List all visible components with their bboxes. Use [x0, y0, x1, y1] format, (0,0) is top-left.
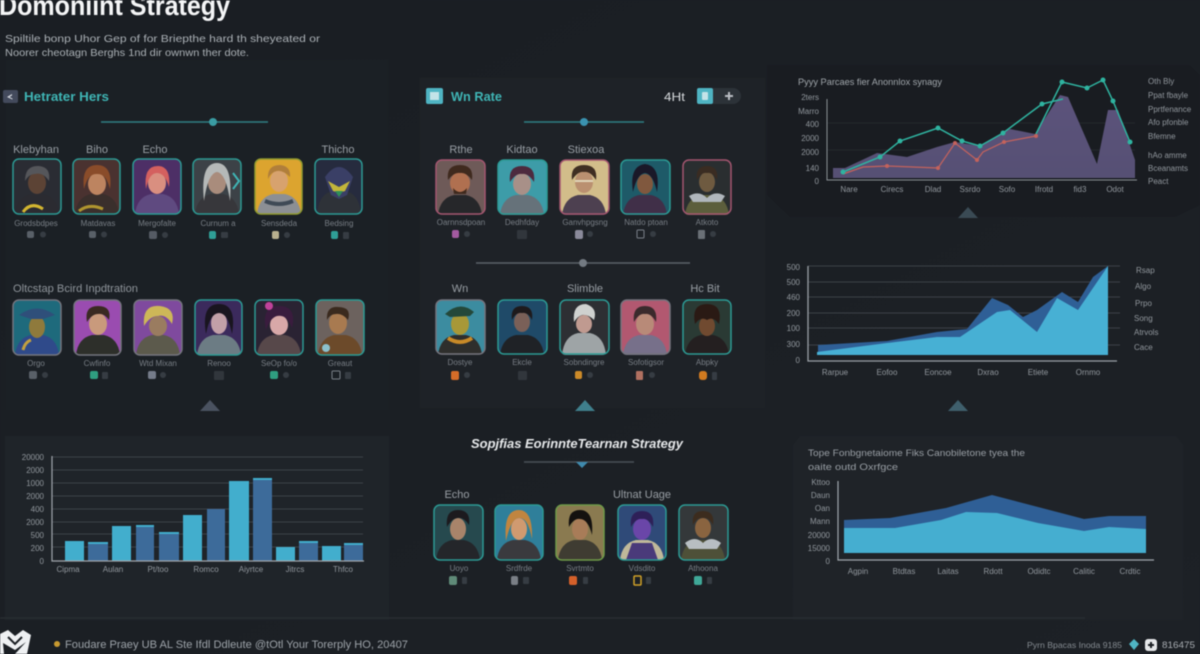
- hero card 23: Uoyo: [450, 564, 469, 573]
- hero card 10: Renoo: [207, 359, 231, 368]
- hero card 21: Sofotigsor: [628, 358, 664, 367]
- red line series: [843, 136, 1036, 174]
- x labels: Crdtic: [1120, 567, 1140, 576]
- x labels: fid3: [1074, 185, 1087, 194]
- triangle marker left: [200, 400, 220, 411]
- footer divider: [0, 617, 1085, 619]
- hero card 6: [315, 159, 362, 239]
- panel: chart 2: [787, 263, 1158, 377]
- heading: hot heroes: Hetrater Hers: [24, 90, 109, 104]
- y labels: 400: [31, 505, 45, 514]
- x labels: Rdott: [983, 567, 1003, 576]
- panel: chart 3: [793, 436, 1183, 620]
- hero card 17: Atkoto: [696, 218, 719, 227]
- hero card 15: Ganvhpgsng: [562, 218, 608, 227]
- x labels: Eofoo: [877, 368, 898, 377]
- x labels: Agpin: [848, 567, 868, 576]
- triangle marker chart 2: [948, 400, 968, 411]
- heading: win rate: Wn Rate: [451, 90, 502, 104]
- x labels: [840, 185, 1124, 194]
- x labels: Ornmo: [1076, 368, 1101, 377]
- x labels: Btdtas: [893, 567, 915, 576]
- legend: Rsap: [1136, 266, 1155, 275]
- hero card 1: Grodsbdpes: [14, 219, 58, 228]
- x labels: [56, 565, 354, 574]
- y axis labels: 2000: [801, 134, 820, 143]
- footer right: 816475: [1162, 640, 1195, 651]
- hero card 17: [683, 160, 731, 239]
- hero card 5: Sensdeda: [261, 219, 298, 228]
- hero card 7: Orgo: [27, 359, 45, 368]
- slider: hot heroes: [101, 118, 268, 126]
- triangle marker chart 1: [958, 207, 978, 218]
- chart title: Pyyy Parcaes fier Anonnlox synagy: [798, 77, 943, 87]
- footer right: [1027, 639, 1195, 651]
- dark blue area: [844, 495, 1146, 553]
- hero card 6: Bedsing: [325, 219, 353, 228]
- panel: chart 1: [767, 65, 1200, 217]
- legend: Ppat fbayle: [1148, 91, 1189, 100]
- x labels: Nare: [840, 185, 858, 194]
- toggle: 4Ht: 4Ht: [664, 90, 686, 104]
- legend: Oth Bly: [1148, 77, 1174, 86]
- hero card 8: Cwfinfo: [84, 359, 111, 368]
- hero labels row 1: Klebyhan: [13, 144, 59, 156]
- y labels: 100: [787, 324, 801, 333]
- legend: Afo pfonble: [1148, 118, 1189, 127]
- bars: [65, 478, 363, 561]
- data points: [840, 78, 1132, 174]
- hero labels row 2 middle: Slimble: [567, 283, 603, 295]
- y labels: 20000: [808, 531, 831, 540]
- light blue area: [817, 266, 1108, 355]
- hero card 5: [255, 159, 302, 239]
- hero labels row 2 middle: Wn: [452, 283, 468, 295]
- y axis labels: 0: [815, 177, 820, 186]
- teal line series: [843, 80, 1130, 172]
- hero card 4: [193, 159, 241, 239]
- x labels: Pt/too: [148, 565, 169, 574]
- toggle: 4Ht: [664, 88, 741, 104]
- footer text left: Foudare Praey UB AL Ste Ifdl Ddleute @tOtl Your Torerply HO, 20407: [65, 639, 408, 651]
- y labels: 2000: [26, 466, 45, 475]
- y labels: 0: [40, 557, 45, 566]
- hero card 14: [498, 160, 547, 239]
- y labels: Daun: [811, 491, 830, 500]
- hero card 27: Athoona: [688, 564, 718, 573]
- legend: [1148, 77, 1192, 186]
- y labels: 15000: [808, 544, 831, 553]
- y labels: 500: [787, 263, 801, 272]
- x labels: Rarpue: [822, 368, 849, 377]
- x labels: Eoncoe: [924, 368, 952, 377]
- hero card 14: Dedhfday: [505, 218, 539, 227]
- hero card 22: Abpky: [696, 358, 718, 367]
- hero card 16: [621, 160, 670, 238]
- chart title: oaite outd Oxrfgce: [808, 462, 898, 473]
- hero card 12: [316, 300, 364, 379]
- y axis labels: Marro: [798, 107, 820, 116]
- light blue area: [844, 512, 1146, 553]
- hero card 25: [556, 505, 604, 585]
- x labels: Odot: [1106, 185, 1124, 194]
- x labels: Ifrotd: [1035, 185, 1053, 194]
- hero labels bottom: [444, 489, 671, 501]
- y labels: 500: [787, 278, 801, 287]
- hero card 25: Svrtmto: [566, 564, 594, 573]
- hero card 9: [134, 300, 182, 379]
- y axis labels: 2ters: [801, 93, 819, 102]
- hero card 26: Vdsdito: [629, 564, 656, 573]
- legend: Pprtfenance: [1148, 105, 1192, 114]
- hero card 13: Oarnnsdpoan: [437, 218, 485, 227]
- hero card 24: [495, 505, 543, 585]
- panel: background hero areas: [6, 60, 765, 410]
- axes: [52, 456, 364, 561]
- y labels: 2000: [26, 492, 45, 501]
- hero card 11: [255, 300, 303, 379]
- hero labels row 1 middle: [449, 144, 605, 156]
- slider: win rate: [524, 118, 644, 126]
- legend: Algo: [1135, 282, 1152, 291]
- y axis labels: [798, 93, 820, 186]
- dark blue area: [818, 266, 1108, 355]
- axes: [808, 266, 1117, 361]
- hero card 23: [434, 505, 483, 585]
- y labels: [787, 263, 801, 365]
- chart title: Tope Fonbgnetaiome Fiks Canobiletone tyea the: [808, 448, 1025, 459]
- hero labels row 2 middle: Hc Bit: [690, 283, 720, 295]
- y labels: 2000: [26, 518, 45, 527]
- y labels: [808, 478, 831, 566]
- y labels: Mann: [810, 517, 830, 526]
- hero card 9: Wtd Mixan: [139, 359, 177, 368]
- y labels: 460: [787, 293, 801, 302]
- x labels: [822, 368, 1101, 377]
- gridlines and axes: [827, 123, 1135, 150]
- legend: Bceanamts: [1148, 164, 1188, 173]
- hero card 3: [133, 159, 181, 239]
- x labels: Jitrcs: [286, 565, 304, 574]
- hero card 19: Ekcle: [512, 358, 532, 367]
- legend: Bfemne: [1148, 132, 1176, 141]
- legend: Peact: [1148, 177, 1169, 186]
- hero labels bottom: Echo: [444, 489, 470, 501]
- hero card 13: [436, 160, 485, 238]
- hero labels row 1 middle: Kidtao: [506, 144, 538, 156]
- hero card 16: Natdo ptoan: [624, 218, 668, 227]
- legend: Song: [1134, 314, 1153, 323]
- y labels: Oan: [815, 504, 830, 513]
- x labels: Romco: [193, 565, 219, 574]
- hero card 22: [683, 300, 731, 380]
- purple area: [833, 95, 1135, 178]
- divider with marker: [524, 462, 634, 468]
- hero labels bottom: Ultnat Uage: [613, 489, 671, 501]
- slider: grey: [476, 259, 690, 267]
- subtitle text: [5, 33, 321, 59]
- legend: [1134, 266, 1158, 352]
- x labels: Aulan: [103, 565, 123, 574]
- x labels: Odidtc: [1027, 567, 1051, 576]
- x labels: Dlad: [925, 185, 941, 194]
- hero card 1: [13, 159, 61, 238]
- x labels: Thfco: [333, 565, 354, 574]
- hero card 21: [621, 300, 670, 380]
- hero labels row 1: [13, 144, 355, 156]
- hero card 20: Sobndingre: [564, 358, 605, 367]
- hero labels row 1: Thicho: [321, 144, 355, 156]
- y labels: [22, 453, 45, 566]
- hero card 15: [560, 160, 609, 239]
- y labels: 0: [796, 356, 801, 365]
- y labels: 200: [787, 309, 801, 318]
- y axis labels: 400: [806, 120, 820, 129]
- y labels: 300: [787, 340, 801, 349]
- hero labels row 1 middle: Rthe: [449, 144, 473, 156]
- hero card 12: Greaut: [328, 359, 353, 368]
- x labels: Laitas: [937, 567, 959, 576]
- hero card 18: [436, 300, 485, 380]
- hero card 20: [560, 300, 609, 379]
- y labels: 1000: [26, 479, 45, 488]
- y axis labels: 2000: [801, 148, 820, 157]
- triangle marker middle: [575, 400, 595, 411]
- y axis labels: 140: [806, 164, 820, 173]
- hero labels row 2 middle: [452, 283, 720, 295]
- heading: team strategy: Sopjfias EorinnteTearnan Strategy: [471, 437, 684, 451]
- x labels: Cipma: [56, 565, 80, 574]
- hero card 10: [195, 300, 242, 380]
- x labels: Aiyrtce: [239, 565, 264, 574]
- icon: shield logo: [0, 630, 31, 654]
- x labels: Cirecs: [881, 185, 903, 194]
- hero card 11: SeOp fo/o: [261, 359, 298, 368]
- hero card 24: Srdfrde: [506, 564, 533, 573]
- hero labels row 1: Biho: [86, 144, 108, 156]
- x labels: Dxrao: [977, 368, 999, 377]
- x labels: Calitic: [1073, 567, 1095, 576]
- panel: bar chart: [5, 436, 389, 620]
- hero card 3: Mergofalte: [138, 219, 176, 228]
- hero card 18: Dostye: [448, 358, 473, 367]
- y labels: Kttoo: [811, 478, 831, 487]
- hero labels row 1: Echo: [142, 144, 168, 156]
- section label: second left row: Oltcstap Bcird Inpdtration: [13, 283, 138, 295]
- legend: Prpo: [1135, 299, 1152, 308]
- hero card 19: [498, 300, 547, 380]
- heading: win rate: [426, 88, 502, 104]
- y labels: 200: [31, 544, 45, 553]
- gridlines: [808, 266, 1120, 345]
- footer right: Pyrn Bpacas Inoda 9185: [1027, 640, 1122, 650]
- legend: Atrvols: [1134, 328, 1158, 337]
- x labels: Sofo: [999, 185, 1016, 194]
- legend: hAo amme: [1148, 151, 1187, 160]
- hero card 2: [73, 159, 120, 238]
- hero card 7: [13, 300, 61, 379]
- hero card 26: [618, 505, 666, 585]
- hero card 27: [679, 505, 728, 585]
- hero card 4: Curnum a: [200, 219, 236, 228]
- x labels: Ssrdo: [960, 185, 981, 194]
- axes: [838, 481, 1154, 560]
- y labels: 20000: [22, 453, 45, 462]
- y labels: 0: [826, 557, 831, 566]
- x labels: Etiete: [1028, 368, 1049, 377]
- hero labels row 1 middle: Stiexoa: [568, 144, 605, 156]
- chart title: [808, 448, 1025, 473]
- subtitle text: Noorer cheotagn Berghs 1nd dir ownwn ther dote.: [5, 47, 249, 59]
- legend: Cace: [1134, 343, 1153, 352]
- x labels: [848, 567, 1140, 576]
- hero card 8: [74, 300, 121, 379]
- hero card 2: Matdavas: [81, 219, 115, 228]
- gridlines: [52, 457, 363, 547]
- y labels: 500: [31, 531, 45, 540]
- subtitle text: Spiltile bonp Uhor Gep of for Briepthe hard th sheyeated or: [5, 33, 321, 45]
